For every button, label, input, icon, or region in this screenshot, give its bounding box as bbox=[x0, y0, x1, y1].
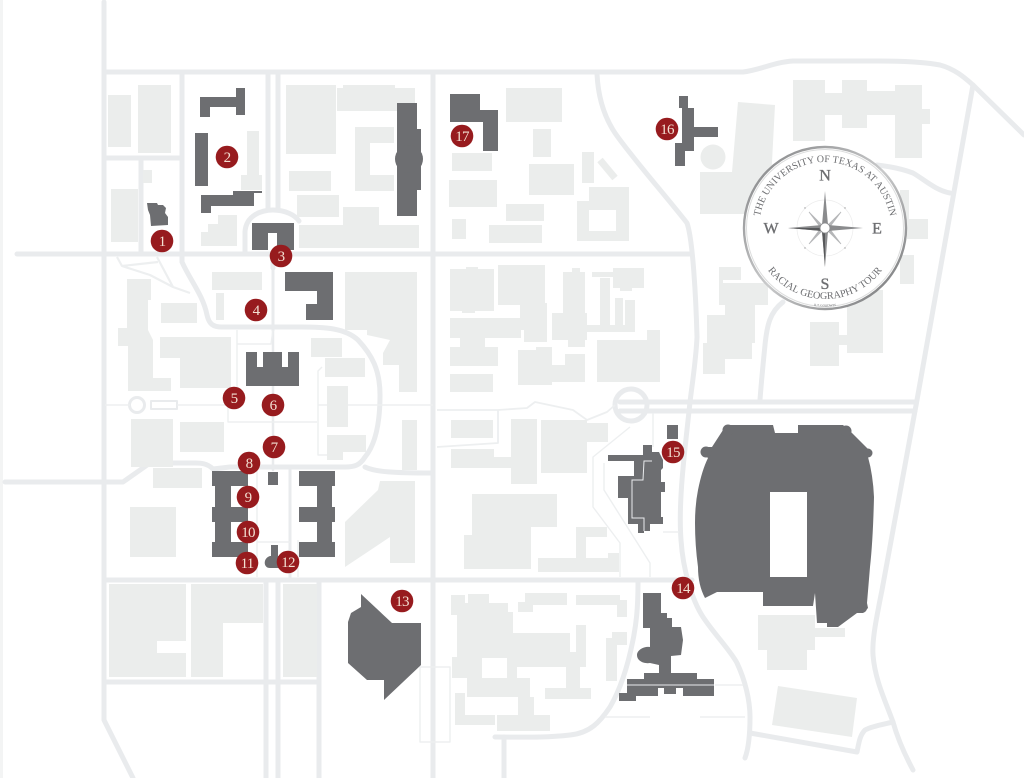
marker 14: 14 bbox=[676, 581, 691, 597]
stadium bbox=[695, 424, 874, 627]
marker 11 bbox=[236, 552, 258, 574]
marker 4 bbox=[245, 299, 267, 321]
building near markers 5 and 6 bbox=[246, 352, 299, 386]
west mall building bbox=[212, 471, 248, 557]
marker 14 bbox=[672, 577, 694, 599]
marker 2: 2 bbox=[224, 150, 231, 166]
marker 15 bbox=[662, 441, 684, 463]
marker 10 bbox=[237, 521, 259, 543]
building 13 bbox=[348, 594, 421, 700]
marker 11: 11 bbox=[241, 556, 254, 572]
building 16 bbox=[675, 96, 718, 166]
seal subtitle: RACIAL GEOGRAPHY TOUR bbox=[768, 266, 882, 299]
small monument bbox=[268, 472, 278, 485]
marker 2 bbox=[216, 146, 238, 168]
east mall building bbox=[299, 471, 335, 557]
marker 9 bbox=[237, 486, 259, 508]
seal title: THE UNIVERSITY OF TEXAS AT AUSTIN bbox=[754, 156, 896, 216]
marker 7: 7 bbox=[271, 440, 279, 456]
marker 4: 4 bbox=[253, 303, 261, 319]
building 17 bbox=[450, 94, 498, 151]
footpaths bbox=[105, 257, 745, 742]
marker 12: 12 bbox=[281, 555, 295, 571]
marker 9: 9 bbox=[245, 490, 252, 506]
marker 6 bbox=[262, 394, 284, 416]
context buildings (light) bbox=[108, 80, 930, 737]
cardinal letters bbox=[763, 168, 882, 293]
marker 3 bbox=[270, 245, 292, 267]
building near marker 15 bbox=[667, 425, 678, 439]
cardinal letters: N bbox=[819, 168, 831, 184]
marker 7 bbox=[263, 436, 285, 458]
main tower bbox=[395, 103, 423, 216]
building 12 bbox=[265, 545, 285, 568]
marker 16: 16 bbox=[660, 122, 675, 138]
marker 16 bbox=[656, 118, 678, 140]
building 15 bbox=[608, 445, 665, 533]
marker 10: 10 bbox=[241, 525, 255, 541]
building 4 bbox=[285, 272, 333, 320]
marker 6: 6 bbox=[270, 398, 278, 414]
marker 12 bbox=[277, 551, 299, 573]
cardinal letters: W bbox=[763, 220, 779, 238]
cardinal letters: S bbox=[821, 276, 829, 293]
building 2 west wing bbox=[195, 133, 208, 186]
cardinal letters: E bbox=[872, 220, 882, 238]
building 1 bbox=[147, 203, 168, 226]
building 2 south wing bbox=[201, 191, 262, 213]
marker 5: 5 bbox=[231, 391, 238, 407]
compass seal bbox=[742, 146, 908, 310]
marker 8: 8 bbox=[246, 456, 253, 472]
marker 17: 17 bbox=[455, 129, 470, 145]
seal credit: R.T. GOODWIN bbox=[814, 304, 836, 307]
tour buildings (dark) bbox=[147, 88, 874, 701]
marker 5 bbox=[223, 387, 245, 409]
marker 3: 3 bbox=[278, 249, 285, 265]
marker 17 bbox=[451, 125, 473, 147]
building 14 bbox=[619, 593, 714, 701]
building 3 bbox=[252, 223, 294, 250]
marker 1 bbox=[151, 230, 173, 252]
marker 8 bbox=[238, 452, 260, 474]
building 2 north wing bbox=[200, 88, 245, 117]
compass rose bbox=[788, 191, 863, 267]
marker 1: 1 bbox=[159, 234, 166, 250]
marker 15: 15 bbox=[666, 445, 680, 461]
marker 13 bbox=[391, 590, 413, 612]
seal disc bbox=[744, 147, 906, 309]
marker 13: 13 bbox=[395, 594, 409, 610]
